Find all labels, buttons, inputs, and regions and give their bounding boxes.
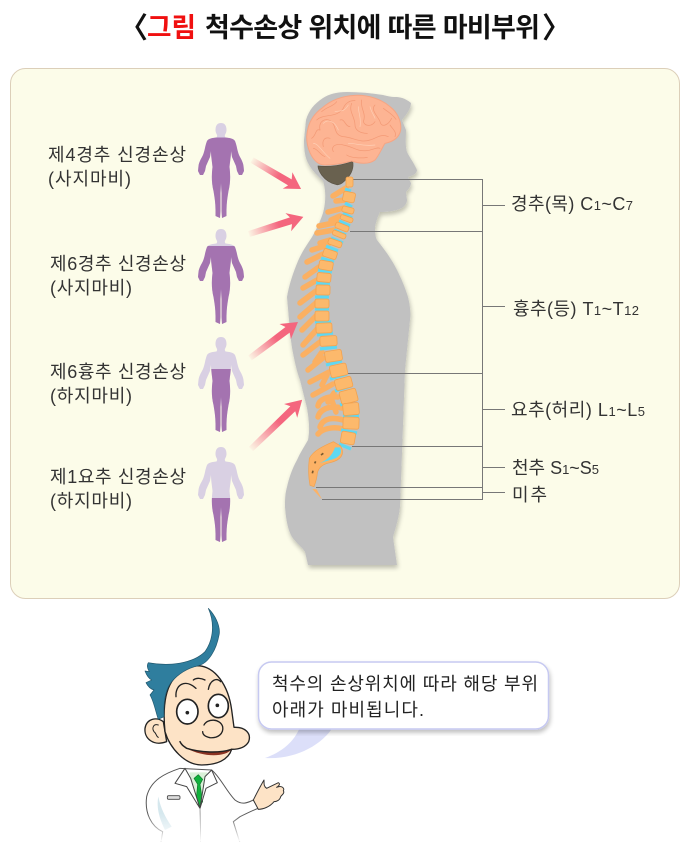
- figure: 제6흉추 하지마비: [198, 337, 244, 432]
- doctor character: [140, 608, 284, 852]
- collar: [175, 768, 217, 808]
- fade floor: [140, 842, 247, 852]
- arrow 3: [244, 314, 304, 366]
- arrow 4: [244, 393, 309, 456]
- left label 3: 제6흉추 신경손상: [50, 362, 186, 382]
- left label 2: [50, 254, 186, 298]
- left label 3: (하지마비): [50, 386, 132, 406]
- right label: thoracic: 흉추(등) T1~T12: [513, 299, 639, 319]
- body silhouette: [285, 92, 417, 565]
- brows: [176, 678, 221, 697]
- title: 그림: [147, 13, 196, 43]
- right label: coccyx: 미추: [512, 485, 547, 505]
- spine: [300, 177, 359, 499]
- left label 2: (사지마비): [50, 278, 132, 298]
- discs: [315, 189, 359, 449]
- fade: [140, 813, 245, 842]
- pocket: [167, 796, 180, 799]
- hair: [145, 608, 219, 719]
- arrow 1: [247, 151, 306, 197]
- arrow 2: [246, 208, 306, 244]
- vertebral bodies: [315, 177, 359, 445]
- speech bubble: 척수의 손상위치에 따라 해당 부위: [272, 674, 538, 694]
- eyes: [177, 699, 198, 724]
- title: 〈: [119, 13, 148, 45]
- left label 3: [50, 362, 186, 406]
- speech bubble: 아래가 마비됩니다.: [272, 700, 424, 720]
- left label 2: 제6경추 신경손상: [50, 254, 186, 274]
- shirt and tie: [189, 772, 207, 805]
- left label 1: (사지마비): [48, 169, 131, 189]
- right label: cervical: 경추(목) C1~C7: [511, 194, 633, 214]
- cerebrum: [307, 95, 401, 165]
- cerebellum: [318, 161, 353, 185]
- connector lines: [316, 180, 505, 500]
- left label 4: 제1요추 신경손상: [50, 467, 186, 487]
- head: [164, 666, 249, 765]
- coat: [146, 768, 258, 848]
- left label 4: (하지마비): [50, 491, 132, 511]
- nose: [203, 720, 223, 738]
- title: 척수손상 위치에 따른 마비부위: [205, 13, 540, 43]
- figure: 제4경추 사지마비: [198, 123, 244, 218]
- speech bubble: [258, 662, 548, 758]
- hand: [253, 780, 284, 809]
- figure: 제1요추 하지마비: [198, 447, 244, 542]
- panel: spine diagram: [10, 68, 680, 598]
- ear: [145, 719, 167, 743]
- title: 〉: [542, 13, 571, 45]
- left label 1: 제4경추 신경손상: [48, 145, 186, 165]
- left label 4: [50, 467, 186, 511]
- brain: [307, 95, 401, 185]
- sacrum and coccyx: [309, 442, 343, 499]
- right label: lumbar: 요추(허리) L1~L5: [511, 400, 645, 420]
- title: [119, 13, 571, 45]
- left label 1: [48, 145, 186, 189]
- spinous processes: [300, 188, 346, 395]
- right label: sacral: 천추 S1~S5: [512, 458, 599, 478]
- figure: 제6경추 사지마비: [198, 229, 244, 324]
- mouth: [187, 748, 232, 755]
